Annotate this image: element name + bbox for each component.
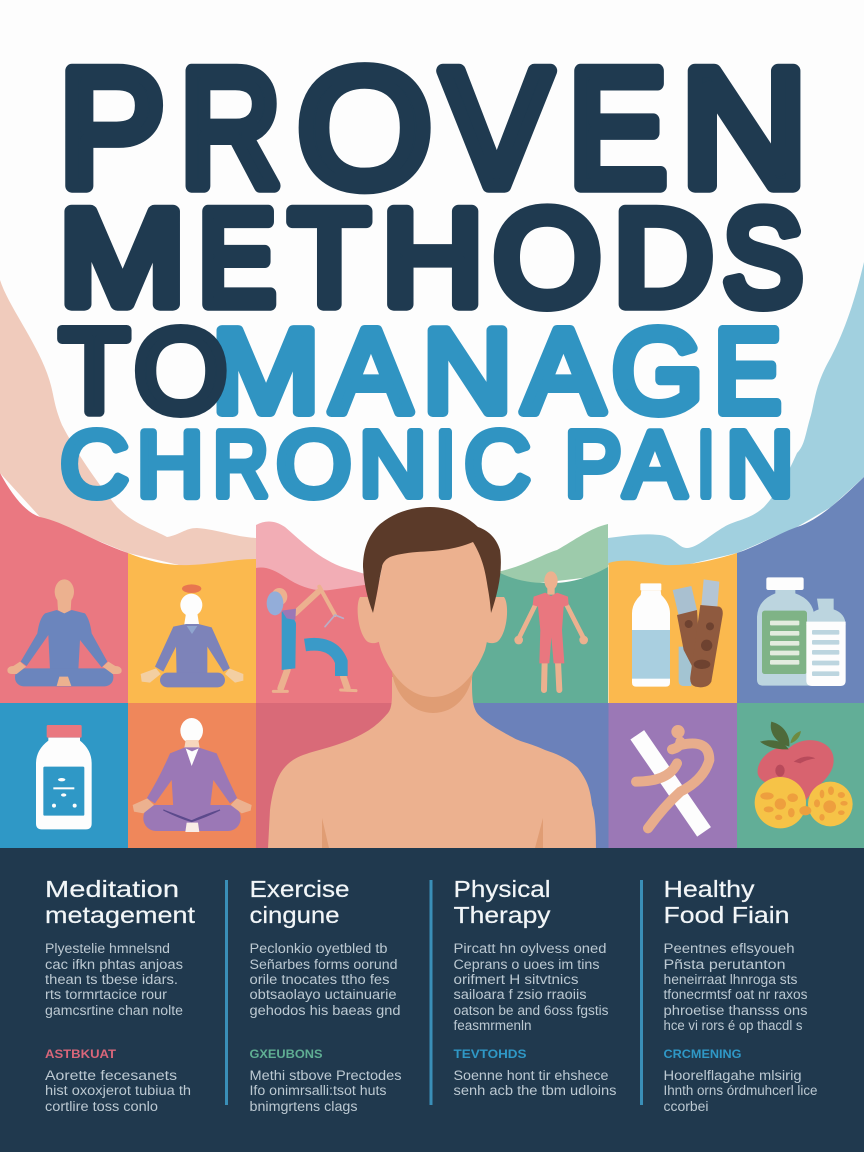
body text: exercise: orile tnocates ttho fes bbox=[250, 972, 390, 987]
heading: meditation: Meditation bbox=[45, 876, 179, 902]
title line: CHRONIC PAIN: I bbox=[435, 412, 456, 516]
body text: healthy food: Peentnes eflsyoueh bbox=[664, 941, 794, 956]
icon: standing figure in coral bbox=[514, 571, 588, 690]
body text: healthy food: phroetise thansss ons bbox=[664, 1003, 808, 1018]
body text: meditation: gamcsrtine chan nolte bbox=[45, 1003, 183, 1018]
person: torso and neck bbox=[268, 677, 596, 848]
body text: physical therapy: Pircatt hn oylvess oned bbox=[454, 941, 606, 956]
body text: physical therapy: sailoara f zsio rraoiis bbox=[454, 987, 587, 1002]
icon: yoga pose figure bbox=[267, 587, 356, 691]
tile: blue lower bbox=[0, 703, 128, 848]
note: meditation bbox=[45, 1068, 191, 1114]
title line: METHODS: H bbox=[382, 182, 483, 333]
title line: PROVEN: O bbox=[298, 36, 432, 222]
title line: PROVEN: V bbox=[442, 36, 551, 222]
title line: MANAGE: E bbox=[714, 305, 781, 438]
title line: PROVEN: P bbox=[59, 36, 165, 222]
tile: purple lower bbox=[608, 703, 737, 848]
body text: exercise: Señarbes forms oorund bbox=[250, 957, 398, 972]
heading: physical therapy bbox=[454, 876, 551, 928]
person: hair bbox=[363, 507, 501, 613]
note: physical therapy bbox=[454, 1068, 617, 1098]
body text: meditation: Plyestelie hmnelsnd bbox=[45, 941, 170, 956]
body text: healthy food: Pñsta perutanton bbox=[664, 957, 786, 972]
body text: physical therapy: oatson be and 6oss fgstis bbox=[454, 1003, 609, 1018]
title line: METHODS: O bbox=[494, 182, 601, 333]
tile: green lower bbox=[737, 703, 864, 848]
heading: meditation bbox=[45, 876, 196, 928]
tile: blue right bbox=[737, 477, 864, 703]
title line: CHRONIC PAIN: N bbox=[359, 412, 427, 516]
title line: CHRONIC PAIN: P bbox=[564, 412, 622, 516]
subheading: physical therapy: TEVTOHDS bbox=[454, 1047, 526, 1061]
tile: green centre bbox=[433, 567, 608, 703]
subheading: meditation: ASTBKUAT bbox=[45, 1047, 117, 1061]
heading: healthy food: Healthy bbox=[664, 876, 755, 902]
title line: MANAGE: N bbox=[423, 305, 512, 438]
body text: physical therapy: Ceprans o uoes im tins bbox=[454, 957, 600, 972]
icon: supplement bottles bbox=[757, 577, 846, 686]
title line: MANAGE: A bbox=[331, 305, 411, 438]
body text: healthy food: tfonecrmtsf oat nr raxos bbox=[664, 987, 808, 1002]
column: meditation bbox=[45, 876, 196, 1114]
note: exercise bbox=[250, 1068, 402, 1114]
icon: fruit bowl bbox=[755, 722, 853, 828]
panel: colour tile grid bbox=[0, 473, 864, 848]
heading: healthy food: Food Fiain bbox=[664, 902, 790, 928]
title line: TO: O bbox=[134, 305, 227, 438]
title line: MANAGE: M bbox=[211, 305, 320, 438]
title line: PROVEN: E bbox=[568, 36, 667, 222]
title line: METHODS: T bbox=[290, 182, 369, 333]
panel: dark info band bbox=[0, 848, 864, 1152]
body text: healthy food bbox=[664, 941, 808, 1033]
column: physical therapy bbox=[454, 876, 617, 1098]
title line: TO: T bbox=[59, 305, 129, 438]
title line: CHRONIC PAIN: R bbox=[213, 412, 269, 516]
title line: CHRONIC PAIN: A bbox=[624, 412, 686, 516]
body text: healthy food: heneirraat lhnroga sts bbox=[664, 972, 798, 987]
panel: pale green wave bbox=[480, 524, 608, 590]
divider 3 bbox=[640, 880, 643, 1105]
heading: physical therapy: Physical bbox=[454, 876, 550, 902]
title line: CHRONIC PAIN: I bbox=[697, 412, 715, 516]
tile: yellow right bbox=[608, 553, 737, 703]
divider 2 bbox=[430, 880, 432, 1105]
person: neck shadow bbox=[392, 672, 473, 713]
body text: exercise: Peclonkio oyetbled tb bbox=[250, 941, 388, 956]
tile: coral centre bbox=[256, 567, 433, 703]
body text: meditation: rts tormrtacice rour bbox=[45, 987, 168, 1002]
body text: physical therapy: orifmert H sitvtnics bbox=[454, 972, 579, 987]
heading: exercise: Exercise bbox=[250, 876, 350, 902]
column: healthy food bbox=[664, 876, 818, 1114]
note: physical therapy: senh acb the tbm udloins bbox=[454, 1083, 617, 1098]
title bbox=[59, 36, 807, 516]
title line: PROVEN: R bbox=[180, 36, 281, 222]
subheading: exercise: GXEUBONS bbox=[250, 1047, 322, 1061]
title line: METHODS: D bbox=[614, 182, 713, 333]
title line: MANAGE: A bbox=[523, 305, 604, 438]
body text: exercise: gehodos his baeas gnd bbox=[250, 1003, 400, 1018]
note: healthy food bbox=[664, 1068, 818, 1114]
person: ears bbox=[358, 597, 507, 643]
panel: right pale blue wave bbox=[608, 262, 864, 567]
note: meditation: Aorette fecesanets bbox=[45, 1068, 177, 1083]
note: exercise: bnimgrtens clags bbox=[250, 1099, 358, 1114]
person: arm creases bbox=[322, 818, 543, 848]
panel: pale rose wave bbox=[256, 521, 385, 610]
heading: exercise bbox=[250, 876, 350, 928]
icon: blue meditator bbox=[7, 579, 122, 686]
tile: yellow bbox=[128, 553, 256, 703]
note: exercise: Methi stbove Prectodes bbox=[250, 1068, 402, 1083]
icon: violet meditator with white hair bbox=[141, 584, 243, 687]
title line: PROVEN: N bbox=[681, 36, 807, 222]
note: meditation: hist oxoxjerot tubiua th bbox=[45, 1083, 191, 1098]
heading: meditation: metagement bbox=[45, 902, 196, 928]
person: face bbox=[374, 535, 492, 697]
subheading: healthy food: CRCMENING bbox=[664, 1047, 742, 1061]
title line: METHODS: S bbox=[723, 182, 803, 333]
central person bbox=[268, 507, 596, 848]
body text: healthy food: hce vi rors é op thacdl s bbox=[664, 1018, 803, 1033]
body text: physical therapy bbox=[454, 941, 609, 1033]
body text: meditation: cac ifkn phtas anjoas bbox=[45, 957, 183, 972]
tile: indigo lower bbox=[434, 703, 609, 848]
title line: CHRONIC PAIN: C bbox=[60, 412, 129, 516]
icon: purple meditator bbox=[133, 718, 252, 832]
heading: healthy food bbox=[664, 876, 790, 928]
note: exercise: Ifo onimrsalli:tsot huts bbox=[250, 1083, 387, 1098]
panel: left pale pink wave bbox=[0, 280, 257, 566]
icon: figure wrapped around bandage bbox=[636, 725, 709, 828]
body text: exercise bbox=[250, 941, 400, 1018]
title line: CHRONIC PAIN: N bbox=[726, 412, 794, 516]
divider 1 bbox=[225, 880, 228, 1105]
tile: coral bbox=[0, 473, 128, 703]
icon: bottle and chocolate bars bbox=[632, 579, 723, 687]
body text: meditation: thean ts tbese idars. bbox=[45, 972, 178, 987]
tile: orange lower bbox=[128, 703, 256, 848]
note: physical therapy: Soenne hont tir ehshece bbox=[454, 1068, 608, 1083]
body text: meditation bbox=[45, 941, 183, 1018]
tile: rose lower bbox=[256, 703, 434, 848]
icon: medicine bottle bbox=[36, 725, 92, 829]
note: healthy food: Ihnth orns órdmuhcerl lice bbox=[664, 1083, 818, 1098]
title line: CHRONIC PAIN: C bbox=[464, 412, 530, 516]
title line: CHRONIC PAIN: O bbox=[276, 412, 351, 516]
title line: CHRONIC PAIN: H bbox=[137, 412, 204, 516]
title line: METHODS: E bbox=[198, 182, 276, 333]
heading: exercise: cingune bbox=[250, 902, 340, 928]
body text: physical therapy: feasmrmenln bbox=[454, 1018, 532, 1033]
note: meditation: cortlire toss conlo bbox=[45, 1099, 158, 1114]
heading: physical therapy: Therapy bbox=[454, 902, 551, 928]
note: healthy food: Hoorelflagahe mlsirig bbox=[664, 1068, 802, 1083]
body text: exercise: obtsaolayo uctainuarie bbox=[250, 987, 396, 1002]
note: healthy food: ccorbei bbox=[664, 1099, 709, 1114]
column: exercise bbox=[250, 876, 402, 1114]
title line: METHODS: M bbox=[59, 182, 185, 333]
title line: MANAGE: G bbox=[612, 305, 703, 438]
